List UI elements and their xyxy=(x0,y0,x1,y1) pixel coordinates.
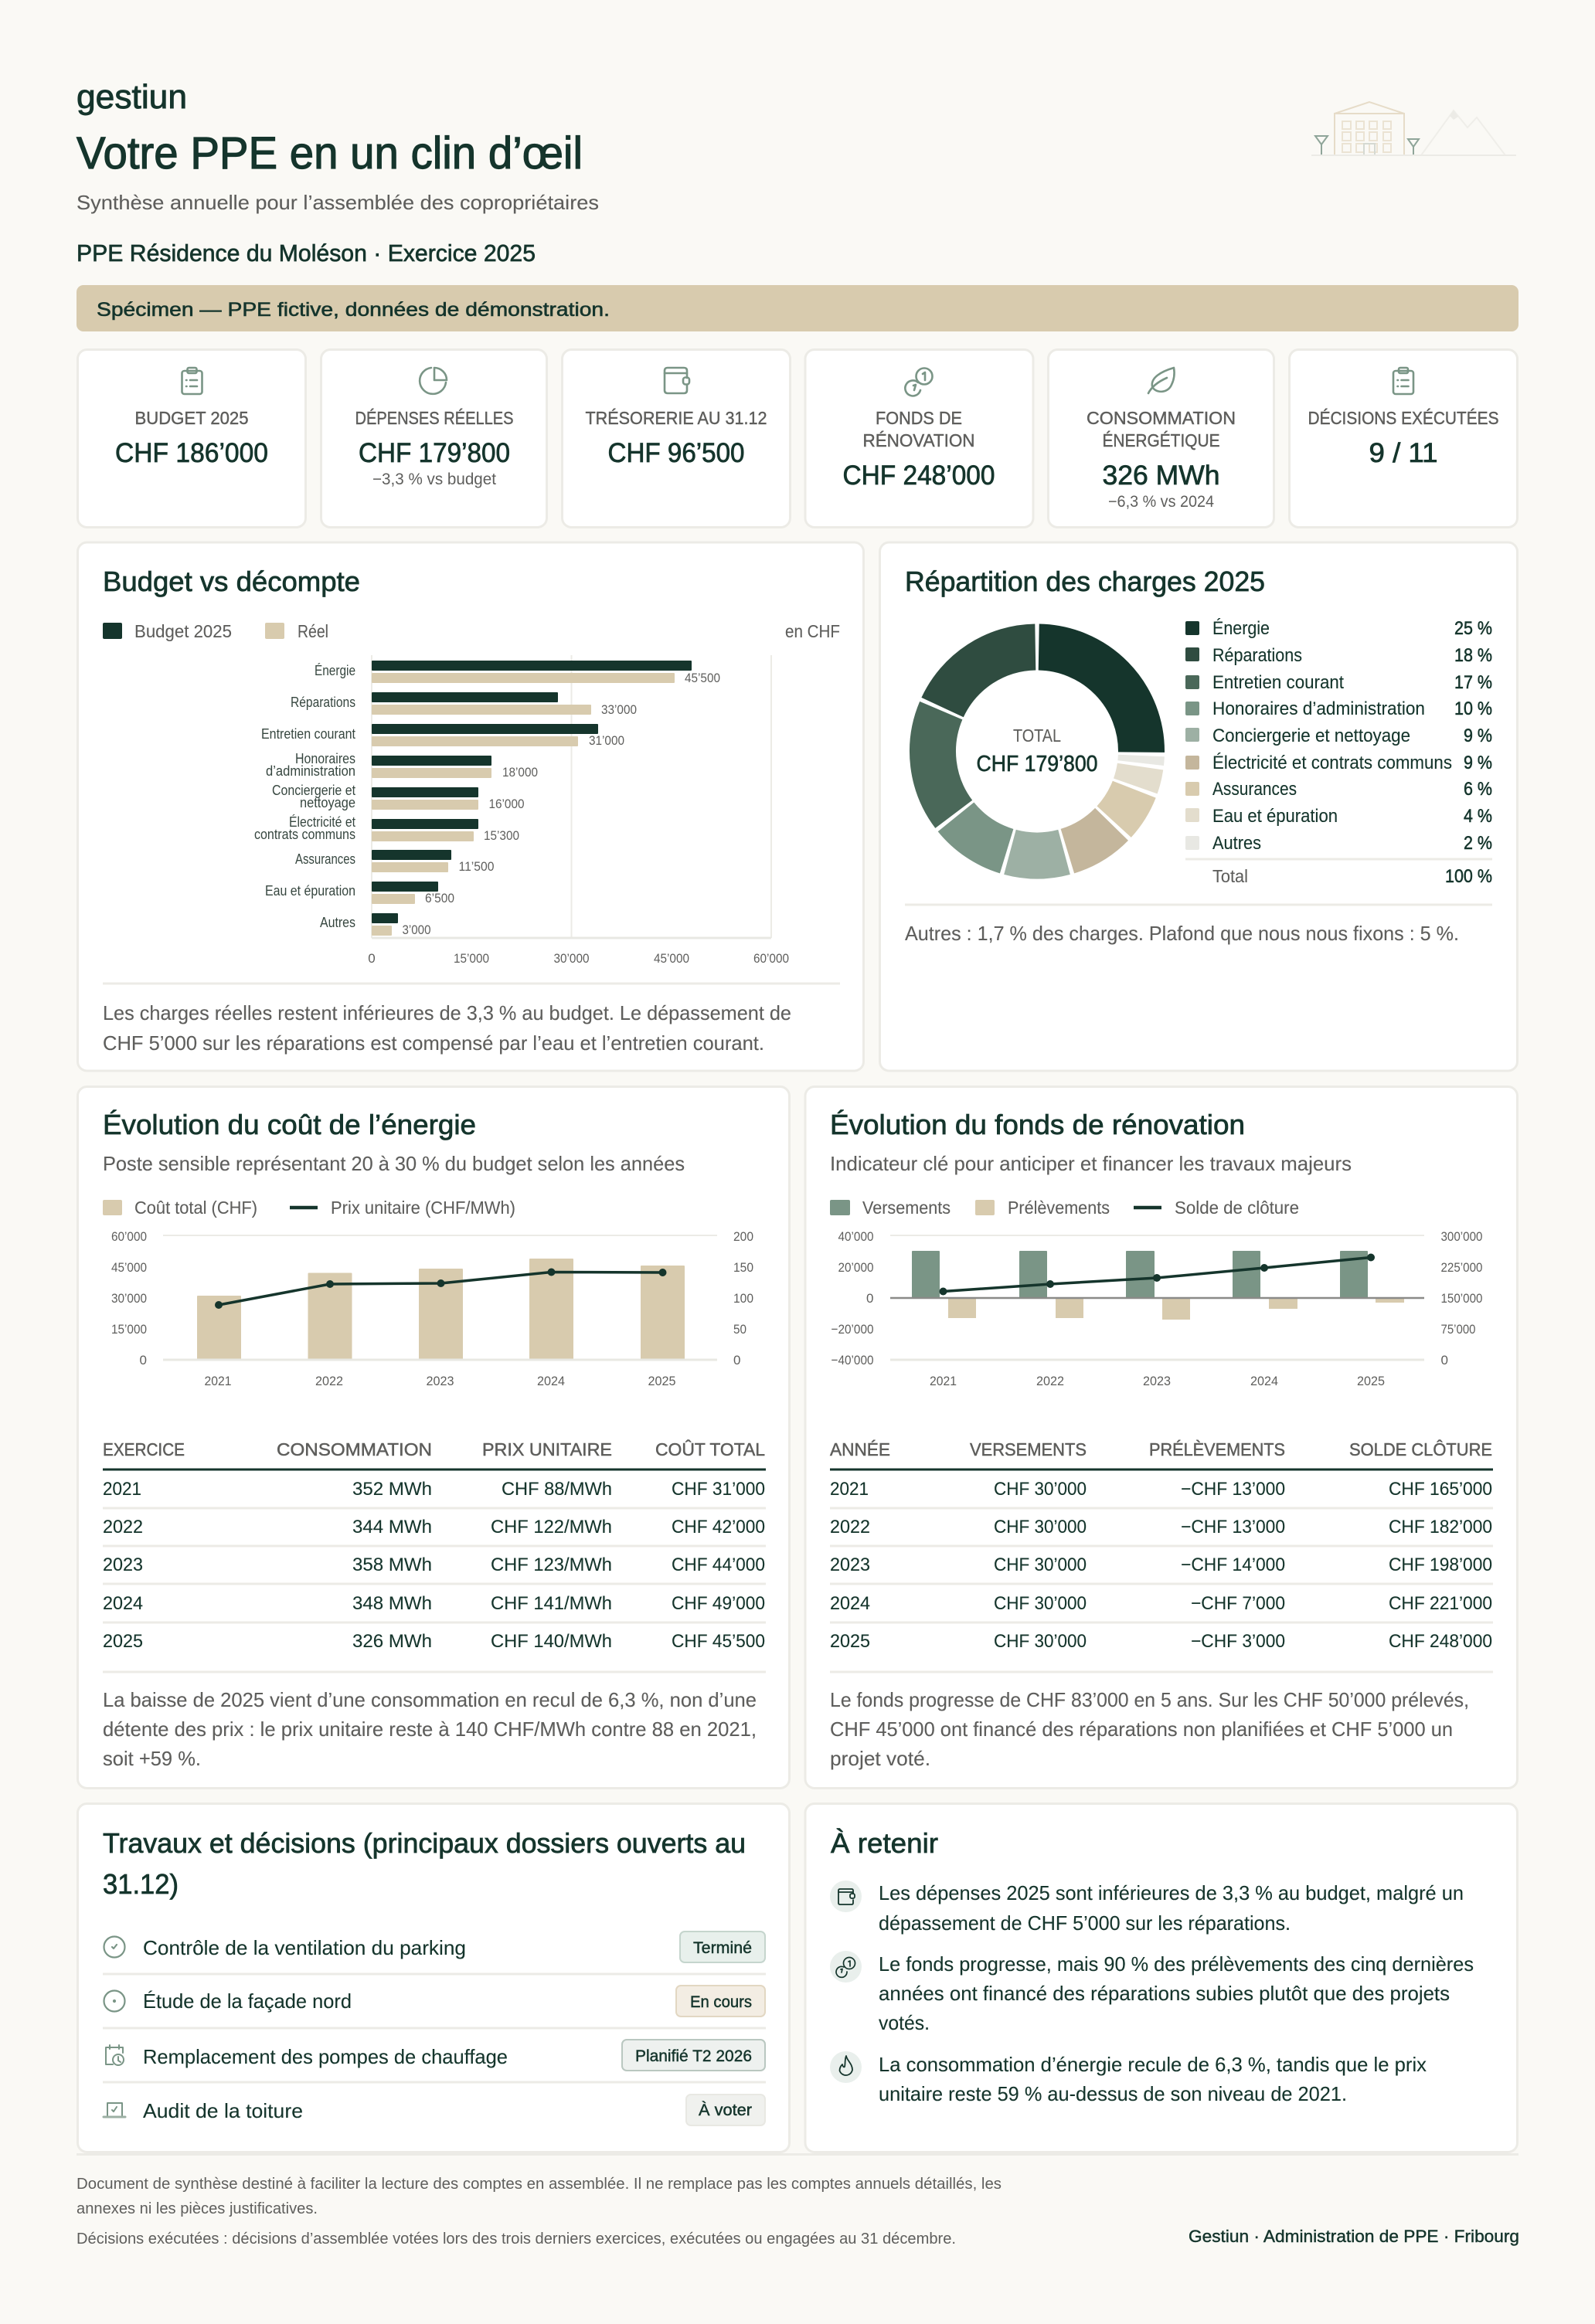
work item: pompes: Planifié T2 2026 xyxy=(635,2047,752,2065)
takeaway: budget xyxy=(830,1881,1464,1935)
icon: coins xyxy=(905,368,932,396)
kpi: budget 2025: BUDGET 2025 xyxy=(134,408,249,428)
combo chart: energy cost and unit price: 2024 xyxy=(537,1374,565,1388)
table: energy by year xyxy=(103,1439,766,1672)
heading: Évolution du fonds de rénovation xyxy=(830,1109,1245,1140)
combo chart: energy cost and unit price: 2025 xyxy=(648,1374,675,1388)
bar chart: budget vs réel: 45’000 xyxy=(654,951,689,966)
bar chart: budget vs réel: 15’300 xyxy=(484,828,519,843)
note: Autres : 1,7 % des charges. Plafond que nous nous fixons : 5 %. xyxy=(905,922,1459,945)
combo chart: fund flows and closing balance: 2025 xyxy=(1357,1374,1385,1388)
commentary xyxy=(103,1688,757,1770)
legend table: 100 % xyxy=(1445,866,1492,887)
combo chart: fund flows and closing balance: 75’000 xyxy=(1440,1322,1476,1337)
disclaimer: Document de synthèse destiné à faciliter la lecture des comptes en assemblée. Il ne remplace pas les comptes annuels détaillés, les xyxy=(77,2176,1002,2193)
icon: pie chart xyxy=(420,368,447,394)
table: energy by year: CHF 140/MWh xyxy=(491,1631,612,1652)
specimen banner: Spécimen — PPE fictive, données de démonstration. xyxy=(97,299,610,321)
table: energy by year: CHF 49’000 xyxy=(672,1593,765,1614)
bar chart: budget vs réel: Électricité et xyxy=(289,814,355,830)
work item: façade: Étude de la façade nord xyxy=(143,1989,352,2013)
combo chart: fund flows and closing balance xyxy=(832,1229,1482,1388)
combo chart: fund flows and closing balance: 0 xyxy=(1440,1353,1448,1368)
bar chart: budget vs réel: 11’500 xyxy=(459,859,495,874)
bar chart: budget vs réel: Honoraires xyxy=(295,751,355,766)
table: energy by year: CHF 44’000 xyxy=(672,1554,765,1575)
kpi: fonds de rénovation: FONDS DE xyxy=(876,408,962,428)
table: fund by year: −CHF 14’000 xyxy=(1181,1554,1285,1575)
work item: ventilation xyxy=(104,1932,765,1962)
table: energy by year: COÛT TOTAL xyxy=(655,1439,765,1459)
legend table xyxy=(1185,618,1492,887)
panel: évolution du fonds de rénovation xyxy=(805,1086,1518,1788)
panel: budget vs décompte xyxy=(77,542,864,1071)
table: fund by year: PRÉLÈVEMENTS xyxy=(1149,1439,1285,1459)
disclaimer xyxy=(77,2176,1002,2248)
donut chart xyxy=(889,604,1185,899)
legend table: 4 % xyxy=(1464,806,1492,827)
legend table: Réparations xyxy=(1212,645,1302,666)
table: fund by year xyxy=(830,1439,1493,1672)
legend table: 25 % xyxy=(1454,618,1492,639)
work item: toiture: À voter xyxy=(699,2101,752,2119)
bar chart: budget vs réel: Énergie xyxy=(315,663,355,678)
work item: toiture: Audit de la toiture xyxy=(143,2099,303,2122)
bar chart: budget vs réel: Entretien courant xyxy=(261,726,355,742)
legend table: Eau et épuration xyxy=(1212,806,1338,827)
table: energy by year: PRIX UNITAIRE xyxy=(482,1439,612,1459)
takeaway: fonds: Le fonds progresse, mais 90 % des prélèvements des cinq dernières xyxy=(879,1952,1474,1976)
combo chart: energy cost and unit price: 50 xyxy=(733,1322,746,1337)
combo chart: energy cost and unit price xyxy=(111,1229,753,1388)
disclaimer: Décisions exécutées : décisions d’assemblée votées lors des trois derniers exercices, exécutées ou engagées au 31 décembre. xyxy=(77,2231,956,2248)
kpi: consommation énergétique xyxy=(1048,349,1274,527)
heading xyxy=(103,1827,746,1900)
combo chart: fund flows and closing balance: 40’000 xyxy=(838,1229,873,1244)
bar chart: budget vs réel: 18’000 xyxy=(502,765,538,780)
table: fund by year: 2022 xyxy=(830,1517,870,1537)
takeaway: énergie xyxy=(830,2051,1427,2105)
table: energy by year: 2021 xyxy=(103,1479,141,1500)
takeaway: énergie: La consommation d’énergie recule de 6,3 %, tandis que le prix xyxy=(879,2053,1427,2076)
legend table: Honoraires d’administration xyxy=(1212,698,1425,719)
legend: Solde de clôture xyxy=(1175,1198,1299,1218)
donut centre total: TOTAL xyxy=(1013,725,1061,746)
commentary: CHF 45’000 ont financé des réparations non planifiées et CHF 5’000 un xyxy=(830,1718,1453,1741)
icon: check xyxy=(104,1936,125,1958)
bar chart: budget vs réel: Assurances xyxy=(295,851,355,867)
legend table: Autres xyxy=(1212,833,1261,854)
subheading: Indicateur clé pour anticiper et financer les travaux majeurs xyxy=(830,1152,1352,1175)
legend: Versements xyxy=(862,1198,951,1218)
kpi: trésorerie xyxy=(563,349,790,527)
bar chart: budget vs réel: nettoyage xyxy=(300,795,355,810)
legend table: 9 % xyxy=(1464,753,1492,773)
heading: À retenir xyxy=(831,1827,938,1859)
donut centre total: CHF 179’800 xyxy=(977,752,1097,776)
kpi: consommation énergétique: ÉNERGÉTIQUE xyxy=(1102,430,1219,450)
title: Votre PPE en un clin d’œil xyxy=(77,128,583,178)
legend table: Assurances xyxy=(1212,779,1297,800)
combo chart: fund flows and closing balance: 0 xyxy=(866,1291,873,1306)
combo chart: energy cost and unit price: 100 xyxy=(733,1291,753,1306)
icon: calendar and clock xyxy=(106,2045,124,2065)
legend table: Conciergerie et nettoyage xyxy=(1212,725,1410,746)
commentary: Les charges réelles restent inférieures de 3,3 % au budget. Le dépassement de xyxy=(103,1001,791,1024)
table: energy by year: 348 MWh xyxy=(352,1593,432,1614)
combo chart: energy cost and unit price: 0 xyxy=(733,1353,740,1368)
combo chart: energy cost and unit price: 60’000 xyxy=(111,1229,147,1244)
kpi: consommation énergétique: CONSOMMATION xyxy=(1087,408,1236,428)
bar chart: budget vs réel: 0 xyxy=(368,951,376,966)
subtitle: Synthèse annuelle pour l’assemblée des copropriétaires xyxy=(77,191,599,214)
work item: pompes: Remplacement des pompes de chauffage xyxy=(143,2045,508,2068)
panel: travaux et décisions xyxy=(77,1803,790,2152)
legend: Prix unitaire (CHF/MWh) xyxy=(331,1198,515,1218)
bar chart: budget vs réel: 6’500 xyxy=(425,891,454,905)
kpi: trésorerie: CHF 96’500 xyxy=(607,438,745,468)
heading: Évolution du coût de l’énergie xyxy=(103,1109,476,1140)
table: fund by year: SOLDE CLÔTURE xyxy=(1349,1439,1492,1459)
icon: clipboard xyxy=(1393,368,1413,394)
kpi: fonds de rénovation: CHF 248’000 xyxy=(842,460,995,491)
takeaway: budget: dépassement de CHF 5’000 sur les réparations. xyxy=(879,1911,1291,1935)
panel: évolution du coût de l'énergie xyxy=(77,1086,790,1788)
kpi: trésorerie: TRÉSORERIE AU 31.12 xyxy=(586,408,767,428)
bar chart: budget vs réel: 30’000 xyxy=(553,951,589,966)
table: fund by year: VERSEMENTS xyxy=(970,1439,1087,1459)
takeaway: budget: Les dépenses 2025 sont inférieures de 3,3 % au budget, malgré un xyxy=(879,1881,1464,1904)
legend table: Total xyxy=(1212,866,1248,886)
icon: coins xyxy=(836,1958,855,1977)
combo chart: fund flows and closing balance: 300’000 xyxy=(1440,1229,1482,1244)
panel: à retenir xyxy=(805,1803,1518,2152)
combo chart: fund flows and closing balance: 150’000 xyxy=(1440,1291,1482,1306)
table: fund by year: CHF 198’000 xyxy=(1389,1554,1492,1575)
icon: clipboard xyxy=(182,368,202,394)
combo chart: fund flows and closing balance: 225’000 xyxy=(1440,1260,1482,1275)
footer xyxy=(77,2176,1519,2248)
table: energy by year: CHF 122/MWh xyxy=(491,1517,612,1537)
legend table: 18 % xyxy=(1454,645,1492,666)
table: energy by year: 344 MWh xyxy=(352,1517,432,1537)
kpi: décisions exécutées: 9 / 11 xyxy=(1369,438,1437,468)
legend table: 6 % xyxy=(1464,779,1492,800)
commentary xyxy=(830,1688,1469,1770)
bar chart: budget vs réel: 3’000 xyxy=(402,922,431,937)
combo chart: fund flows and closing balance: −20’000 xyxy=(832,1322,873,1337)
icon: wallet xyxy=(838,1889,855,1904)
combo chart: energy cost and unit price: 2023 xyxy=(427,1374,454,1388)
table: fund by year: 2025 xyxy=(830,1631,870,1652)
bar chart: budget vs réel: 60’000 xyxy=(753,951,789,966)
combo chart: fund flows and closing balance: 2024 xyxy=(1250,1374,1278,1388)
table: energy by year: 2023 xyxy=(103,1554,143,1575)
combo chart: energy cost and unit price: 2022 xyxy=(315,1374,343,1388)
table: energy by year: 358 MWh xyxy=(352,1554,432,1575)
bar chart: budget vs réel: 31’000 xyxy=(589,733,624,748)
table: energy by year: CHF 141/MWh xyxy=(491,1593,612,1614)
legend table: 10 % xyxy=(1454,698,1492,719)
legend: Budget 2025 xyxy=(134,621,232,641)
table: fund by year: ANNÉE xyxy=(830,1439,890,1459)
subheading: Poste sensible représentant 20 à 30 % du budget selon les années xyxy=(103,1152,685,1175)
legend: Coût total (CHF) xyxy=(134,1198,257,1218)
table: fund by year: CHF 30’000 xyxy=(994,1554,1087,1575)
combo chart: energy cost and unit price: 45’000 xyxy=(111,1260,147,1275)
legend: Prélèvements xyxy=(1008,1198,1110,1218)
bar chart: budget vs réel: 16’000 xyxy=(488,797,524,811)
icon: in progress dot xyxy=(104,1990,125,2012)
table: fund by year: CHF 30’000 xyxy=(994,1593,1087,1614)
kpi: dépenses réelles: −3,3 % vs budget xyxy=(372,471,496,488)
table: fund by year: CHF 165’000 xyxy=(1389,1479,1492,1500)
table: fund by year: CHF 182’000 xyxy=(1389,1517,1492,1537)
table: fund by year: −CHF 13’000 xyxy=(1181,1479,1285,1500)
kpi: dépenses réelles: CHF 179’800 xyxy=(359,438,510,468)
bar chart: budget vs réel xyxy=(254,655,789,966)
legend table: Entretien courant xyxy=(1212,672,1344,693)
legend table: Énergie xyxy=(1212,618,1270,639)
legend xyxy=(830,1198,1299,1218)
bar chart: budget vs réel: Autres xyxy=(320,915,355,930)
panel: répartition des charges xyxy=(879,542,1518,1071)
combo chart: fund flows and closing balance: −40’000 xyxy=(832,1353,873,1368)
header xyxy=(77,78,599,267)
heading: Budget vs décompte xyxy=(103,566,360,597)
work item: façade xyxy=(104,1986,765,2017)
disclaimer: annexes ni les pièces justificatives. xyxy=(77,2200,318,2217)
property and fiscal year: PPE Résidence du Moléson · Exercice 2025 xyxy=(77,240,536,267)
table: fund by year: −CHF 7’000 xyxy=(1191,1593,1285,1614)
kpi: budget 2025 xyxy=(77,349,306,527)
icon: leaf xyxy=(1148,368,1175,393)
combo chart: energy cost and unit price: 200 xyxy=(733,1229,753,1244)
kpi: consommation énergétique: 326 MWh xyxy=(1102,460,1219,491)
legend xyxy=(103,621,840,641)
table: fund by year: −CHF 13’000 xyxy=(1181,1517,1285,1537)
legend table: 9 % xyxy=(1464,725,1492,746)
icon: flame xyxy=(839,2056,852,2075)
table: energy by year: CHF 31’000 xyxy=(672,1479,765,1500)
bar chart: budget vs réel: d’administration xyxy=(266,763,355,779)
heading: Travaux et décisions (principaux dossiers ouverts au xyxy=(103,1827,746,1859)
work item: pompes xyxy=(106,2040,765,2071)
table: energy by year: 2022 xyxy=(103,1517,143,1537)
company signature: Gestiun · Administration de PPE · Fribourg xyxy=(1189,2227,1519,2246)
commentary: Le fonds progresse de CHF 83’000 en 5 ans. Sur les CHF 50’000 prélevés, xyxy=(830,1688,1469,1711)
table: energy by year: EXERCICE xyxy=(103,1439,185,1459)
table: energy by year: CONSOMMATION xyxy=(277,1439,432,1459)
table: energy by year: CHF 45’500 xyxy=(672,1631,765,1652)
table: energy by year: 352 MWh xyxy=(352,1479,432,1500)
commentary: détente des prix : le prix unitaire reste à 140 CHF/MWh contre 88 en 2021, xyxy=(103,1718,757,1741)
combo chart: fund flows and closing balance: 20’000 xyxy=(838,1260,873,1275)
bar chart: budget vs réel: Réparations xyxy=(291,695,355,710)
takeaway: fonds: votés. xyxy=(879,2011,930,2034)
bar chart: budget vs réel: 45’500 xyxy=(685,671,720,685)
table: fund by year: 2024 xyxy=(830,1593,870,1614)
commentary: soit +59 %. xyxy=(103,1747,201,1770)
table: fund by year: CHF 30’000 xyxy=(994,1517,1087,1537)
work item: ventilation: Contrôle de la ventilation du parking xyxy=(143,1936,466,1959)
kpi: dépenses réelles xyxy=(321,349,547,527)
bar chart: budget vs réel: contrats communs xyxy=(254,827,355,842)
specimen banner xyxy=(77,285,1518,331)
table: fund by year: CHF 30’000 xyxy=(994,1479,1087,1500)
table: energy by year: 2025 xyxy=(103,1631,143,1652)
icon: building and mountains illustration xyxy=(1311,102,1516,155)
kpi: fonds de rénovation: RÉNOVATION xyxy=(862,430,975,450)
bar chart: budget vs réel: Eau et épuration xyxy=(265,883,355,899)
brand name: gestiun xyxy=(77,78,187,116)
work item: façade: En cours xyxy=(690,1993,752,2011)
bar chart: budget vs réel: 15’000 xyxy=(454,951,489,966)
table: energy by year: CHF 42’000 xyxy=(672,1517,765,1537)
bar chart: budget vs réel: 33’000 xyxy=(601,702,637,717)
takeaway: énergie: unitaire reste 59 % au-dessus de son niveau de 2021. xyxy=(879,2082,1347,2105)
table: energy by year: CHF 123/MWh xyxy=(491,1554,612,1575)
combo chart: fund flows and closing balance: 2022 xyxy=(1036,1374,1064,1388)
kpi: budget 2025: CHF 186’000 xyxy=(115,438,268,468)
table: energy by year: 326 MWh xyxy=(352,1631,432,1652)
legend table: 2 % xyxy=(1464,833,1492,854)
takeaway: fonds xyxy=(830,1951,1474,2034)
icon: wallet xyxy=(665,368,689,393)
table: fund by year: 2021 xyxy=(830,1479,869,1500)
kpi: décisions exécutées: DÉCISIONS EXÉCUTÉES xyxy=(1308,408,1499,428)
commentary xyxy=(103,1001,791,1055)
table: fund by year: −CHF 3’000 xyxy=(1191,1631,1285,1652)
kpi: consommation énergétique: −6,3 % vs 2024 xyxy=(1108,493,1214,511)
combo chart: energy cost and unit price: 15’000 xyxy=(111,1322,147,1337)
combo chart: energy cost and unit price: 0 xyxy=(140,1353,147,1368)
bar chart: budget vs réel: Conciergerie et xyxy=(272,783,355,798)
commentary: CHF 5’000 sur les réparations est compensé par l’eau et l’entretien courant. xyxy=(103,1031,764,1055)
kpi: décisions exécutées xyxy=(1289,349,1518,527)
table: energy by year: CHF 88/MWh xyxy=(502,1479,612,1500)
legend: en CHF xyxy=(785,621,840,641)
table: fund by year: 2023 xyxy=(830,1554,870,1575)
kpi: dépenses réelles: DÉPENSES RÉELLES xyxy=(355,408,513,428)
combo chart: fund flows and closing balance: 2023 xyxy=(1143,1374,1171,1388)
commentary: La baisse de 2025 vient d’une consommation en recul de 6,3 %, non d’une xyxy=(103,1688,757,1711)
legend table: 17 % xyxy=(1454,672,1492,693)
table: fund by year: CHF 221’000 xyxy=(1389,1593,1492,1614)
combo chart: energy cost and unit price: 150 xyxy=(733,1260,753,1275)
donut centre total xyxy=(977,725,1097,776)
icon: vote box xyxy=(104,2103,125,2117)
commentary: projet voté. xyxy=(830,1747,930,1770)
kpi: fonds de rénovation xyxy=(805,349,1033,527)
table: energy by year: 2024 xyxy=(103,1593,143,1614)
heading: Répartition des charges 2025 xyxy=(905,566,1265,597)
work item: ventilation: Terminé xyxy=(693,1939,752,1957)
legend table: Électricité et contrats communs xyxy=(1212,753,1452,773)
combo chart: fund flows and closing balance: 2021 xyxy=(930,1374,957,1388)
work item: toiture xyxy=(104,2095,765,2125)
combo chart: energy cost and unit price: 2021 xyxy=(204,1374,232,1388)
combo chart: energy cost and unit price: 30’000 xyxy=(111,1291,147,1306)
legend: Réel xyxy=(298,621,328,641)
heading: 31.12) xyxy=(103,1868,179,1900)
table: fund by year: CHF 30’000 xyxy=(994,1631,1087,1652)
takeaway: fonds: années ont financé des réparations subies plutôt que des projets xyxy=(879,1982,1450,2005)
table: fund by year: CHF 248’000 xyxy=(1389,1631,1492,1652)
legend xyxy=(103,1198,515,1218)
